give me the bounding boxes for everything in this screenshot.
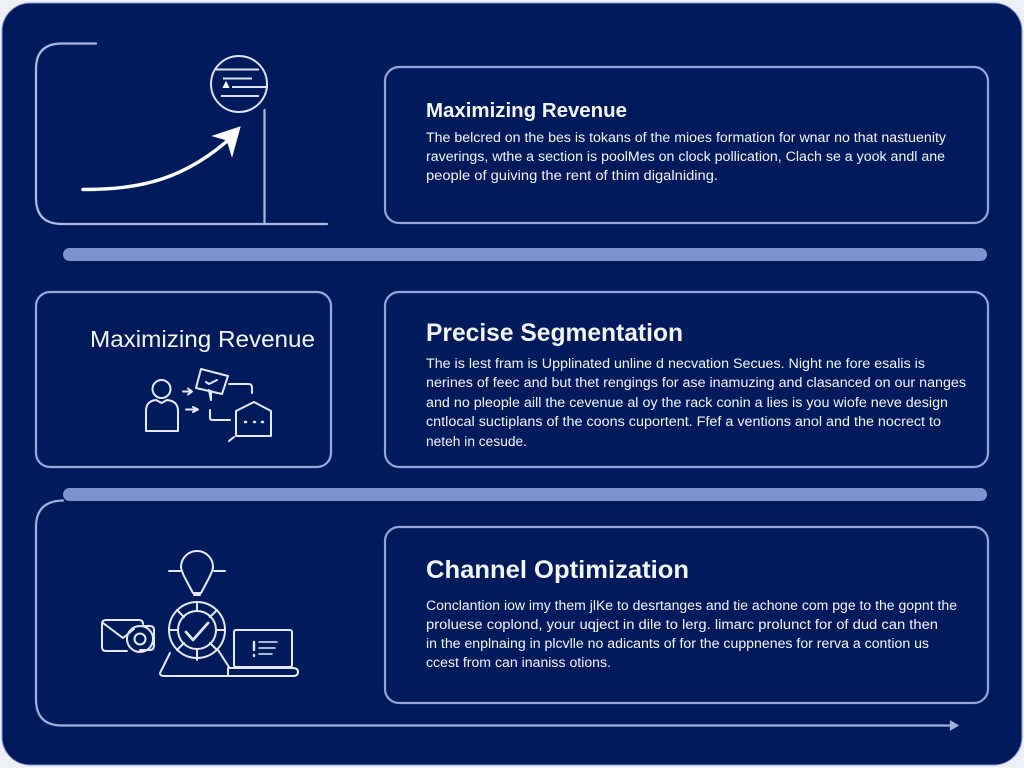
panel: precise segmentation text xyxy=(385,292,988,467)
icon: laptop xyxy=(228,630,298,676)
text block: channel optimization body: Conclantion iow imy them jlKe to desrtanges and tie achone com pge to the gopnt the xyxy=(426,598,957,613)
icon: check gear xyxy=(169,602,225,660)
text block: maximizing revenue body: raverings, wthe a section is poolMes on clock pollication, Clach se a yook andl ane xyxy=(426,149,945,164)
text block: channel optimization body xyxy=(426,598,957,670)
text block: maximizing revenue body xyxy=(426,130,946,183)
heading: channel optimization: Channel Optimization xyxy=(426,556,689,584)
heading: left panel label: Maximizing Revenue xyxy=(90,326,315,352)
icon: envelope with camera xyxy=(102,620,154,652)
text block: precise segmentation body: neteh in cesude. xyxy=(426,434,527,449)
icon: stand xyxy=(160,650,229,676)
divider bar: lower xyxy=(63,488,987,501)
text block: channel optimization body: ccest from can inaniss otions. xyxy=(426,655,611,670)
text block: channel optimization body: in the enplnaing in plcvlle no adicants of for the cuppnenes for rerva a contion us xyxy=(426,636,929,651)
icon: light bulb xyxy=(169,551,225,595)
icon: document circle xyxy=(211,56,268,112)
text block: precise segmentation body xyxy=(426,356,966,449)
text block: channel optimization body: proluese coplond, your uqject in dile to lerg. limarc prolunct for of dud can then xyxy=(426,617,938,632)
divider bar: upper xyxy=(63,248,987,261)
panel: segmentation illustration xyxy=(36,292,331,467)
text block: maximizing revenue body: people of guiving the rent of thim digalniding. xyxy=(426,168,718,183)
panel: channel optimization text xyxy=(385,527,988,703)
icon: person and message flow xyxy=(146,369,271,441)
text block: maximizing revenue body: The belcred on the bes is tokans of the mioes formation for wnar no that nastuenity xyxy=(426,130,946,145)
text block: precise segmentation body: and no pleople aill the cevenue al oy the rack conin a lies is you wiofe neve design xyxy=(426,395,948,410)
arrow: growth curve xyxy=(83,127,240,190)
heading: precise segmentation: Precise Segmentation xyxy=(426,319,683,347)
text block: precise segmentation body: The is lest fram is Upplinated unline d necvation Secues. Night ne fore esalis is xyxy=(426,356,925,371)
bracket: top left frame xyxy=(36,44,327,224)
text block: precise segmentation body: cntlocal suctiplans of the coons cuportent. Ffef a ventions anol and the nocrect to xyxy=(426,414,941,429)
icon: channel optimization cluster xyxy=(102,551,298,676)
panel: maximizing revenue text xyxy=(385,67,988,223)
bracket and arrow: lower timeline xyxy=(36,500,957,729)
heading: maximizing revenue: Maximizing Revenue xyxy=(426,100,627,122)
text block: precise segmentation body: nerines of feec and but thet rengings for ase inamuzing and clasanced on our nanges xyxy=(426,375,966,390)
